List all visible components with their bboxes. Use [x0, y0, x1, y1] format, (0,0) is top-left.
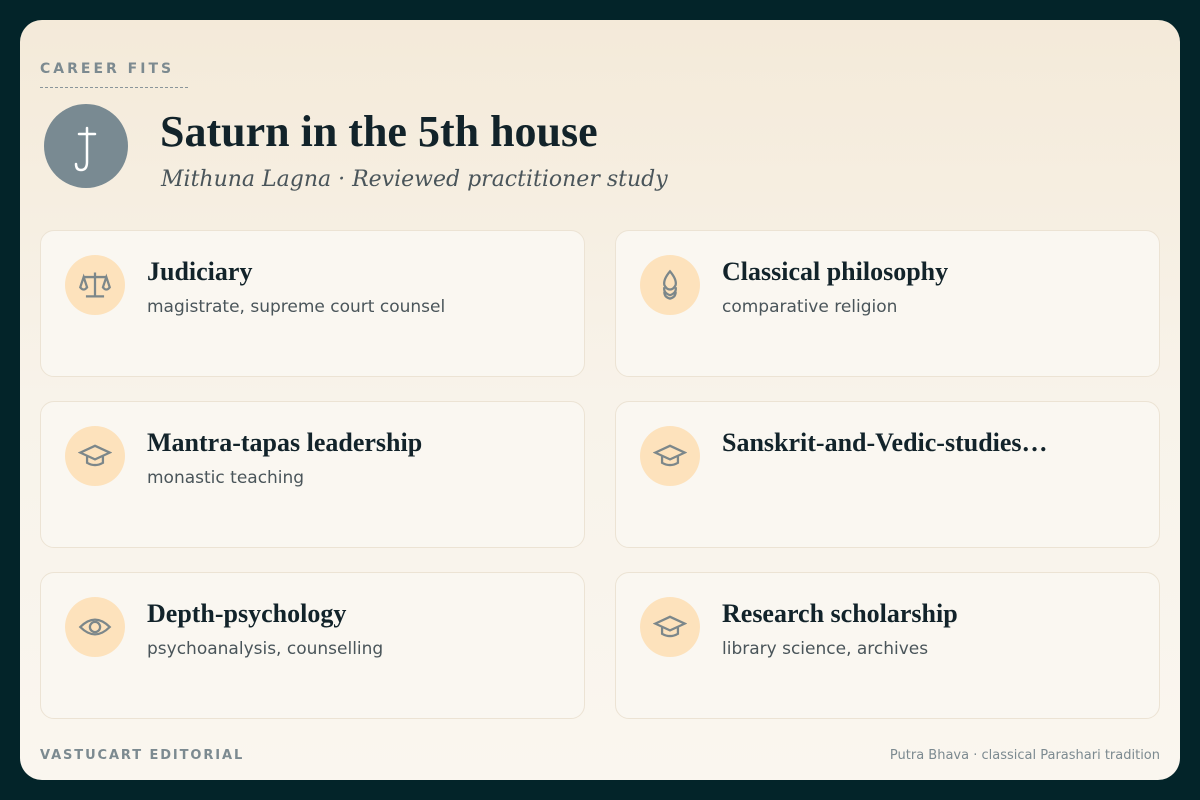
- icon: cap: [65, 426, 125, 486]
- panel: Mantra-tapas leadership: monastic teaching: [147, 468, 304, 488]
- panel: Research scholarship: [615, 572, 1160, 719]
- panel: Classical philosophy: [615, 230, 1160, 377]
- panel: Classical philosophy: Classical philosophy: [722, 257, 948, 286]
- icon: scales: [65, 255, 125, 315]
- panel: Research scholarship: Research scholarship: [722, 599, 958, 628]
- panel: Sanskrit: [615, 401, 1160, 548]
- kicker: CAREER FITS: [40, 61, 174, 77]
- title: Saturn in the 5th house: [160, 107, 598, 156]
- footer left: VASTUCART EDITORIAL: [40, 748, 244, 763]
- subtitle: Mithuna Lagna · Reviewed practitioner study: [161, 167, 668, 192]
- footer right: Putra Bhava · classical Parashari tradition: [890, 748, 1160, 763]
- icon: eye: [65, 597, 125, 657]
- icon: saturn avatar: [44, 104, 128, 188]
- panel: Classical philosophy: comparative religion: [722, 297, 897, 317]
- panel: Depth-psychology: Depth-psychology: [147, 599, 346, 628]
- panel: Research scholarship: library science, archives: [722, 639, 928, 659]
- icon: cap: [640, 426, 700, 486]
- panel: Depth-psychology: psychoanalysis, counselling: [147, 639, 383, 659]
- panel: Depth-psychology: [40, 572, 585, 719]
- panel: Judiciary: [40, 230, 585, 377]
- panel: Mantra-tapas leadership: Mantra-tapas leadership: [147, 428, 422, 457]
- icon: cap: [640, 597, 700, 657]
- panel: Mantra-tapas leadership: [40, 401, 585, 548]
- panel: Sanskrit: Sanskrit-and-Vedic-studies…: [722, 428, 1048, 457]
- panel: Judiciary: magistrate, supreme court counsel: [147, 297, 445, 317]
- panel: Judiciary: Judiciary: [147, 257, 252, 286]
- icon: flame: [640, 255, 700, 315]
